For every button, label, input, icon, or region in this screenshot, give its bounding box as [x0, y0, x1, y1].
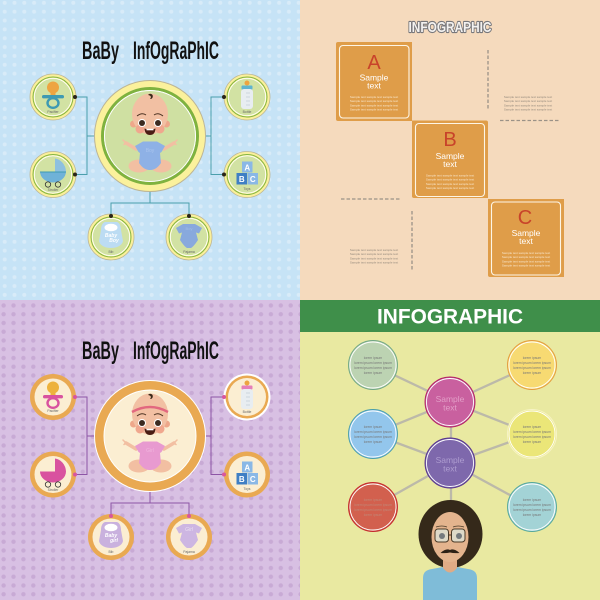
node: pajama: Boy	[186, 226, 192, 231]
step C	[488, 199, 564, 277]
side text bottom left	[350, 248, 398, 265]
step A	[336, 42, 412, 121]
node: bib: Baby	[105, 533, 117, 539]
node: blue text: lorem ipsum lorem ipsum	[354, 430, 392, 434]
node: teal text: lorem ipsum lorem ipsum	[513, 503, 551, 507]
node: toys blocks: C	[250, 475, 256, 484]
node: bib: Baby	[105, 233, 117, 239]
step B: Sample text sample text sample text	[426, 186, 474, 190]
connectors	[73, 395, 226, 518]
node: orange text: lorem ipsum lorem ipsum	[513, 361, 551, 365]
node: bib	[88, 514, 134, 560]
node: red text: lorem ipsum lorem ipsum	[354, 508, 392, 512]
connecting lines	[373, 365, 532, 510]
node: yellow text: lorem ipsum	[523, 425, 541, 429]
title: infographic outlined: INFOGRAPHIC	[408, 19, 492, 36]
hub: purple sample text	[425, 438, 475, 488]
side text bottom left: Sample text sample text sample text	[350, 248, 398, 252]
node: toys blocks	[224, 452, 270, 498]
step C: Sample text sample text sample text	[502, 251, 550, 255]
panel: peach steps infographic	[300, 0, 600, 300]
node: green text: lorem ipsum lorem ipsum	[354, 361, 392, 365]
step A: Sample text sample text sample text	[350, 95, 398, 99]
title: baby infographic blue: InfOgRaPhIC	[133, 37, 219, 65]
node: blue text: lorem ipsum lorem ipsum	[354, 435, 392, 439]
hub: pink sample text: Sample	[436, 394, 465, 404]
step A: Sample	[360, 72, 389, 82]
node: bottle	[224, 374, 270, 420]
person with glasses and moustache	[418, 500, 482, 600]
side text top right: Sample text sample text sample text	[504, 99, 552, 103]
panel: purple baby girl infographic	[0, 300, 300, 600]
node: yellow text: lorem ipsum lorem ipsum	[513, 435, 551, 439]
title: baby infographic purple: BaBy	[82, 337, 119, 365]
node: orange text: lorem ipsum	[523, 371, 541, 375]
step B	[412, 120, 488, 198]
title: baby infographic blue	[82, 37, 219, 65]
title: baby infographic blue: BaBy	[82, 37, 119, 65]
step B: Sample	[436, 151, 465, 161]
title: baby infographic purple	[82, 337, 219, 365]
node: pajama: Girl	[185, 527, 194, 533]
step C: Sample text sample text sample text	[502, 259, 550, 263]
dashed guides	[341, 50, 560, 270]
title: infographic white: INFOGRAPHIC	[377, 306, 523, 328]
hub: purple sample text: Sample	[436, 455, 465, 465]
node: yellow text	[508, 410, 556, 458]
node: bottle: Bottle	[243, 410, 251, 414]
node: orange text: lorem ipsum lorem ipsum	[513, 366, 551, 370]
step A: Sample text sample text sample text	[350, 103, 398, 107]
node: toys blocks: B	[239, 175, 245, 184]
node: bottle: Bottle	[243, 110, 251, 114]
central circle with baby girl	[94, 380, 206, 492]
node: bib: girl	[109, 538, 118, 544]
title: baby infographic purple: InfOgRaPhIC	[133, 337, 219, 365]
panel: blue baby boy infographic	[0, 0, 300, 300]
node: yellow text: lorem ipsum lorem ipsum	[513, 430, 551, 434]
node: stroller	[30, 452, 76, 498]
node: toys blocks: Toys	[244, 187, 251, 191]
node: blue text	[348, 410, 398, 458]
node: green text: lorem ipsum	[364, 356, 382, 360]
node: green text: lorem ipsum lorem ipsum	[354, 366, 392, 370]
step B: Sample text sample text sample text	[426, 174, 474, 178]
node: green text	[348, 340, 398, 390]
node: orange text: lorem ipsum	[523, 356, 541, 360]
node: bib: Bib	[109, 250, 114, 254]
step B: B	[443, 129, 457, 151]
hub: pink sample text	[425, 377, 475, 427]
step B: Sample text sample text sample text	[426, 182, 474, 186]
step A: Sample text sample text sample text	[350, 108, 398, 112]
step C: Sample text sample text sample text	[502, 255, 550, 259]
side text bottom left: Sample text sample text sample text	[350, 252, 398, 256]
step A: text	[367, 80, 381, 90]
node: orange text	[508, 340, 556, 390]
node: toys blocks: B	[239, 475, 245, 484]
step C: Sample text sample text sample text	[502, 264, 550, 268]
side text top right: Sample text sample text sample text	[504, 108, 552, 112]
node: bib: Boy	[109, 238, 119, 244]
connectors	[73, 95, 226, 218]
node: toys blocks: A	[244, 164, 250, 172]
node: blue text: lorem ipsum	[364, 425, 382, 429]
node: pacifier	[30, 374, 76, 420]
node: bib: Bib	[109, 550, 114, 554]
node: red text	[348, 482, 398, 532]
side text bottom left: Sample text sample text sample text	[350, 256, 398, 260]
node: blue text: lorem ipsum	[364, 440, 382, 444]
node: teal text: lorem ipsum	[523, 513, 541, 517]
step A: A	[367, 52, 381, 74]
step B: Sample text sample text sample text	[426, 178, 474, 182]
node: teal text	[508, 482, 556, 532]
node: stroller: Stroller	[48, 188, 59, 192]
node: stroller	[30, 152, 76, 198]
node: yellow text: lorem ipsum	[523, 440, 541, 444]
hub: pink sample text: text	[443, 402, 457, 412]
node: teal text: lorem ipsum lorem ipsum	[513, 508, 551, 512]
node: pacifier	[30, 74, 76, 120]
node: pacifier: Pacifier	[47, 110, 60, 114]
side text top right: Sample text sample text sample text	[504, 95, 552, 99]
node: toys blocks: A	[244, 464, 250, 472]
header band	[300, 300, 600, 332]
step C: Sample	[512, 228, 541, 238]
side text bottom left: Sample text sample text sample text	[350, 261, 398, 265]
node: red text: lorem ipsum lorem ipsum	[354, 503, 392, 507]
node: toys blocks: Toys	[244, 487, 251, 491]
step C: C	[518, 207, 532, 229]
node: bib	[88, 214, 134, 260]
panel: green header mind map infographic	[300, 300, 600, 600]
side text top right: Sample text sample text sample text	[504, 103, 552, 107]
step A: Sample text sample text sample text	[350, 99, 398, 103]
hub: purple sample text: text	[443, 464, 457, 474]
node: red text: lorem ipsum	[364, 498, 382, 502]
node: pacifier: Pacifier	[47, 409, 60, 413]
node: pajama: Pajama	[183, 550, 195, 554]
baby boy figure: Boy	[146, 148, 155, 154]
node: stroller: Stroller	[48, 488, 59, 492]
node: pajama	[166, 214, 212, 260]
step B: text	[443, 159, 457, 169]
node: pajama: Pajama	[183, 250, 195, 254]
node: green text: lorem ipsum	[364, 371, 382, 375]
node: bottle	[224, 74, 270, 120]
node: teal text: lorem ipsum	[523, 498, 541, 502]
step C: text	[519, 236, 533, 246]
baby girl figure: Girl	[146, 448, 154, 454]
node: toys blocks	[224, 152, 270, 198]
central circle with baby boy	[94, 80, 206, 192]
node: toys blocks: C	[250, 175, 256, 184]
node: pajama	[166, 514, 212, 560]
node: red text: lorem ipsum	[364, 513, 382, 517]
side text top right	[504, 95, 552, 112]
